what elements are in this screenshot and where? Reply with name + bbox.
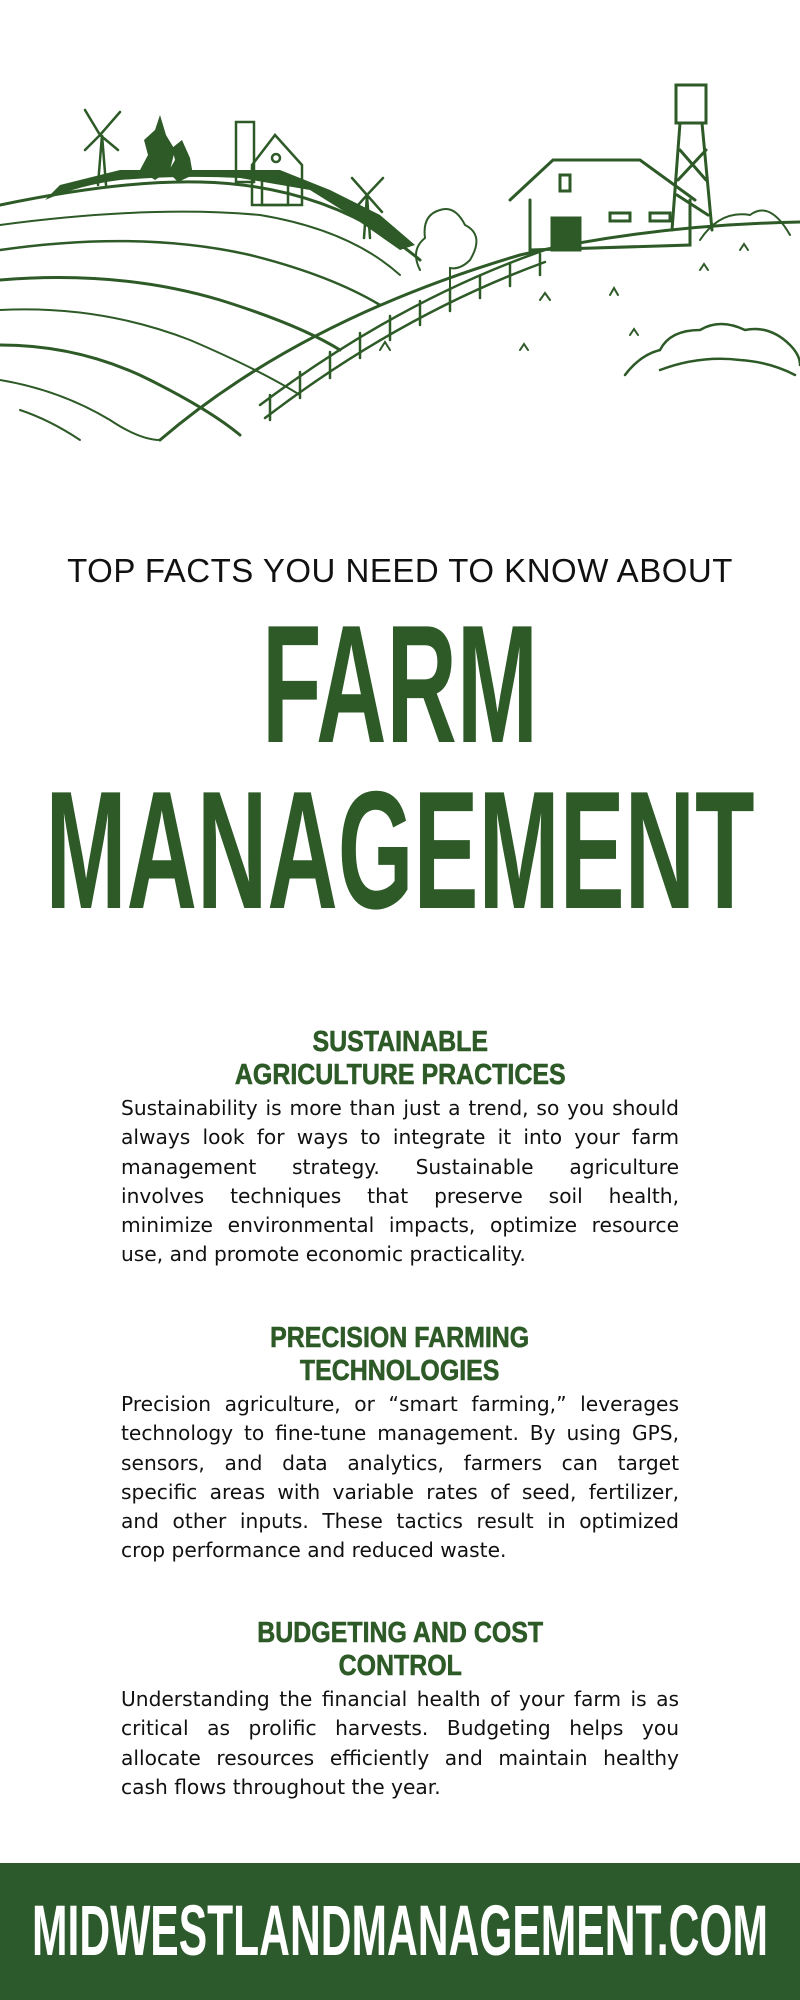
title: FARM: FARM (262, 590, 538, 778)
windmill left (85, 110, 120, 185)
water tower (672, 85, 712, 230)
illustration: farm landscape (0, 84, 800, 442)
heading: sustainable agriculture: SUSTAINABLE (312, 1026, 488, 1058)
heading: precision farming: TECHNOLOGIES (300, 1355, 500, 1387)
heading: budgeting (257, 1617, 544, 1682)
bush tree (416, 209, 790, 290)
windmill center (352, 178, 383, 238)
subtitle: TOP FACTS YOU NEED TO KNOW ABOUT (67, 552, 733, 589)
text: sustainable: Sustainability is more than just a trend, so you should always look for ways to integrate it into your farm management strategy. Sustainable agriculture involves techniques that preserve soil health, minimize environmental impacts, optimize resource use, and promote economic practicality. (121, 1096, 679, 1266)
text: precision: Precision agriculture, or “smart farming,” leverages technology to fine-tune management. By using GPS, sensors, and data analytics, farmers can target specific areas with variable rates of seed, fertilizer, and other inputs. These tactics result in optimized crop performance and reduced waste. (121, 1392, 679, 1562)
heading: precision farming: PRECISION FARMING (270, 1322, 530, 1354)
footer (0, 1863, 800, 2000)
big barn (510, 160, 695, 250)
small barn + silo (236, 122, 302, 205)
heading: budgeting: BUDGETING AND COST (257, 1617, 543, 1649)
heading: precision farming (270, 1322, 530, 1387)
green hedge on left hill top (45, 170, 415, 250)
left field hill (0, 182, 420, 440)
footer: MIDWESTLANDMANAGEMENT.COM (32, 1892, 768, 1971)
title: MANAGEMENT: MANAGEMENT (45, 756, 755, 944)
grass tufts (380, 244, 748, 350)
bushes bottom right (625, 324, 800, 375)
big right hill (160, 222, 800, 440)
heading: sustainable agriculture (235, 1026, 565, 1091)
heading: sustainable agriculture: AGRICULTURE PRACTICES (235, 1059, 565, 1091)
text: budgeting: Understanding the financial health of your farm is as critical as prolific harvests. Budgeting helps you allocate resources efficiently and maintain healthy cash flows throughout the year. (121, 1687, 679, 1799)
trees (140, 115, 193, 182)
fence (260, 250, 545, 420)
heading: budgeting: CONTROL (338, 1650, 462, 1682)
